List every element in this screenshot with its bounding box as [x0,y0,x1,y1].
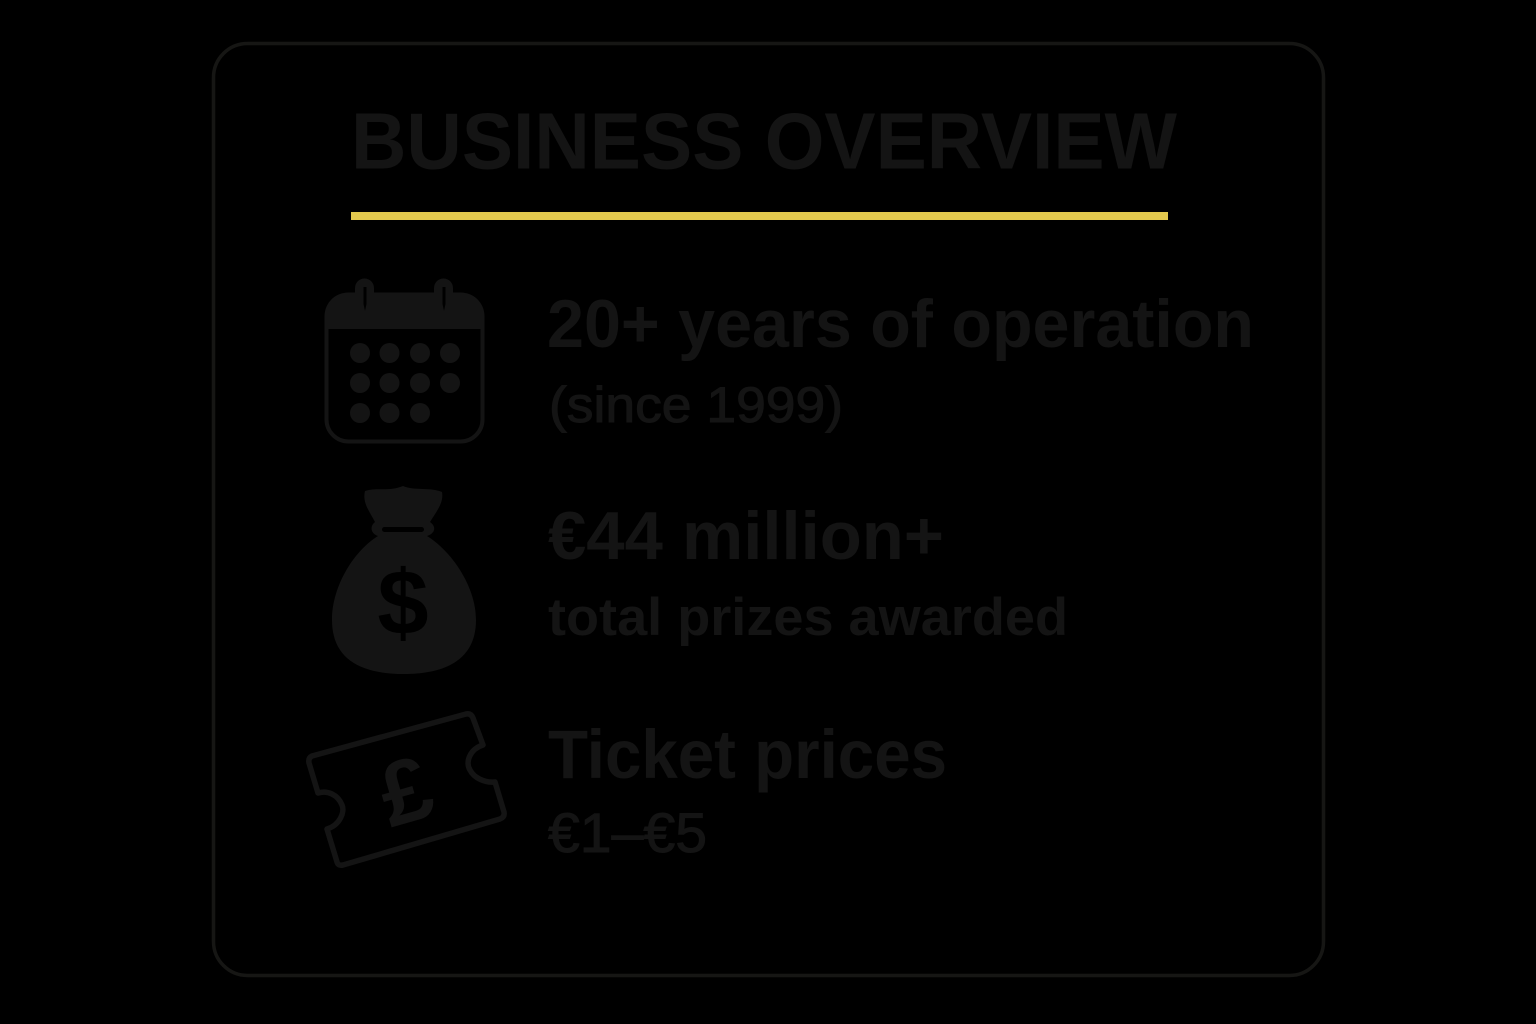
icon: money bag [332,486,476,674]
text: years of operation [547,286,1254,433]
title underline [351,212,1168,220]
text: total prizes [548,498,1068,647]
text: total prizes: total prizes awarded [548,588,1068,647]
text: ticket prices: Ticket prices [548,716,947,793]
text: years of operation: (since 1999) [549,377,843,433]
text: total prizes: €44 million+ [548,498,944,574]
panel: business overview card [214,44,1324,976]
icon: money bag: $ [377,552,429,654]
text: years of operation: 20+ years of operation [547,286,1254,362]
text: ticket prices: €1–€5 [548,801,707,864]
text: ticket prices [548,716,947,864]
title: BUSINESS OVERVIEW [351,96,1177,186]
icon: ticket: £ [368,737,444,847]
icon: calendar [325,278,484,442]
icon: ticket [309,714,504,865]
